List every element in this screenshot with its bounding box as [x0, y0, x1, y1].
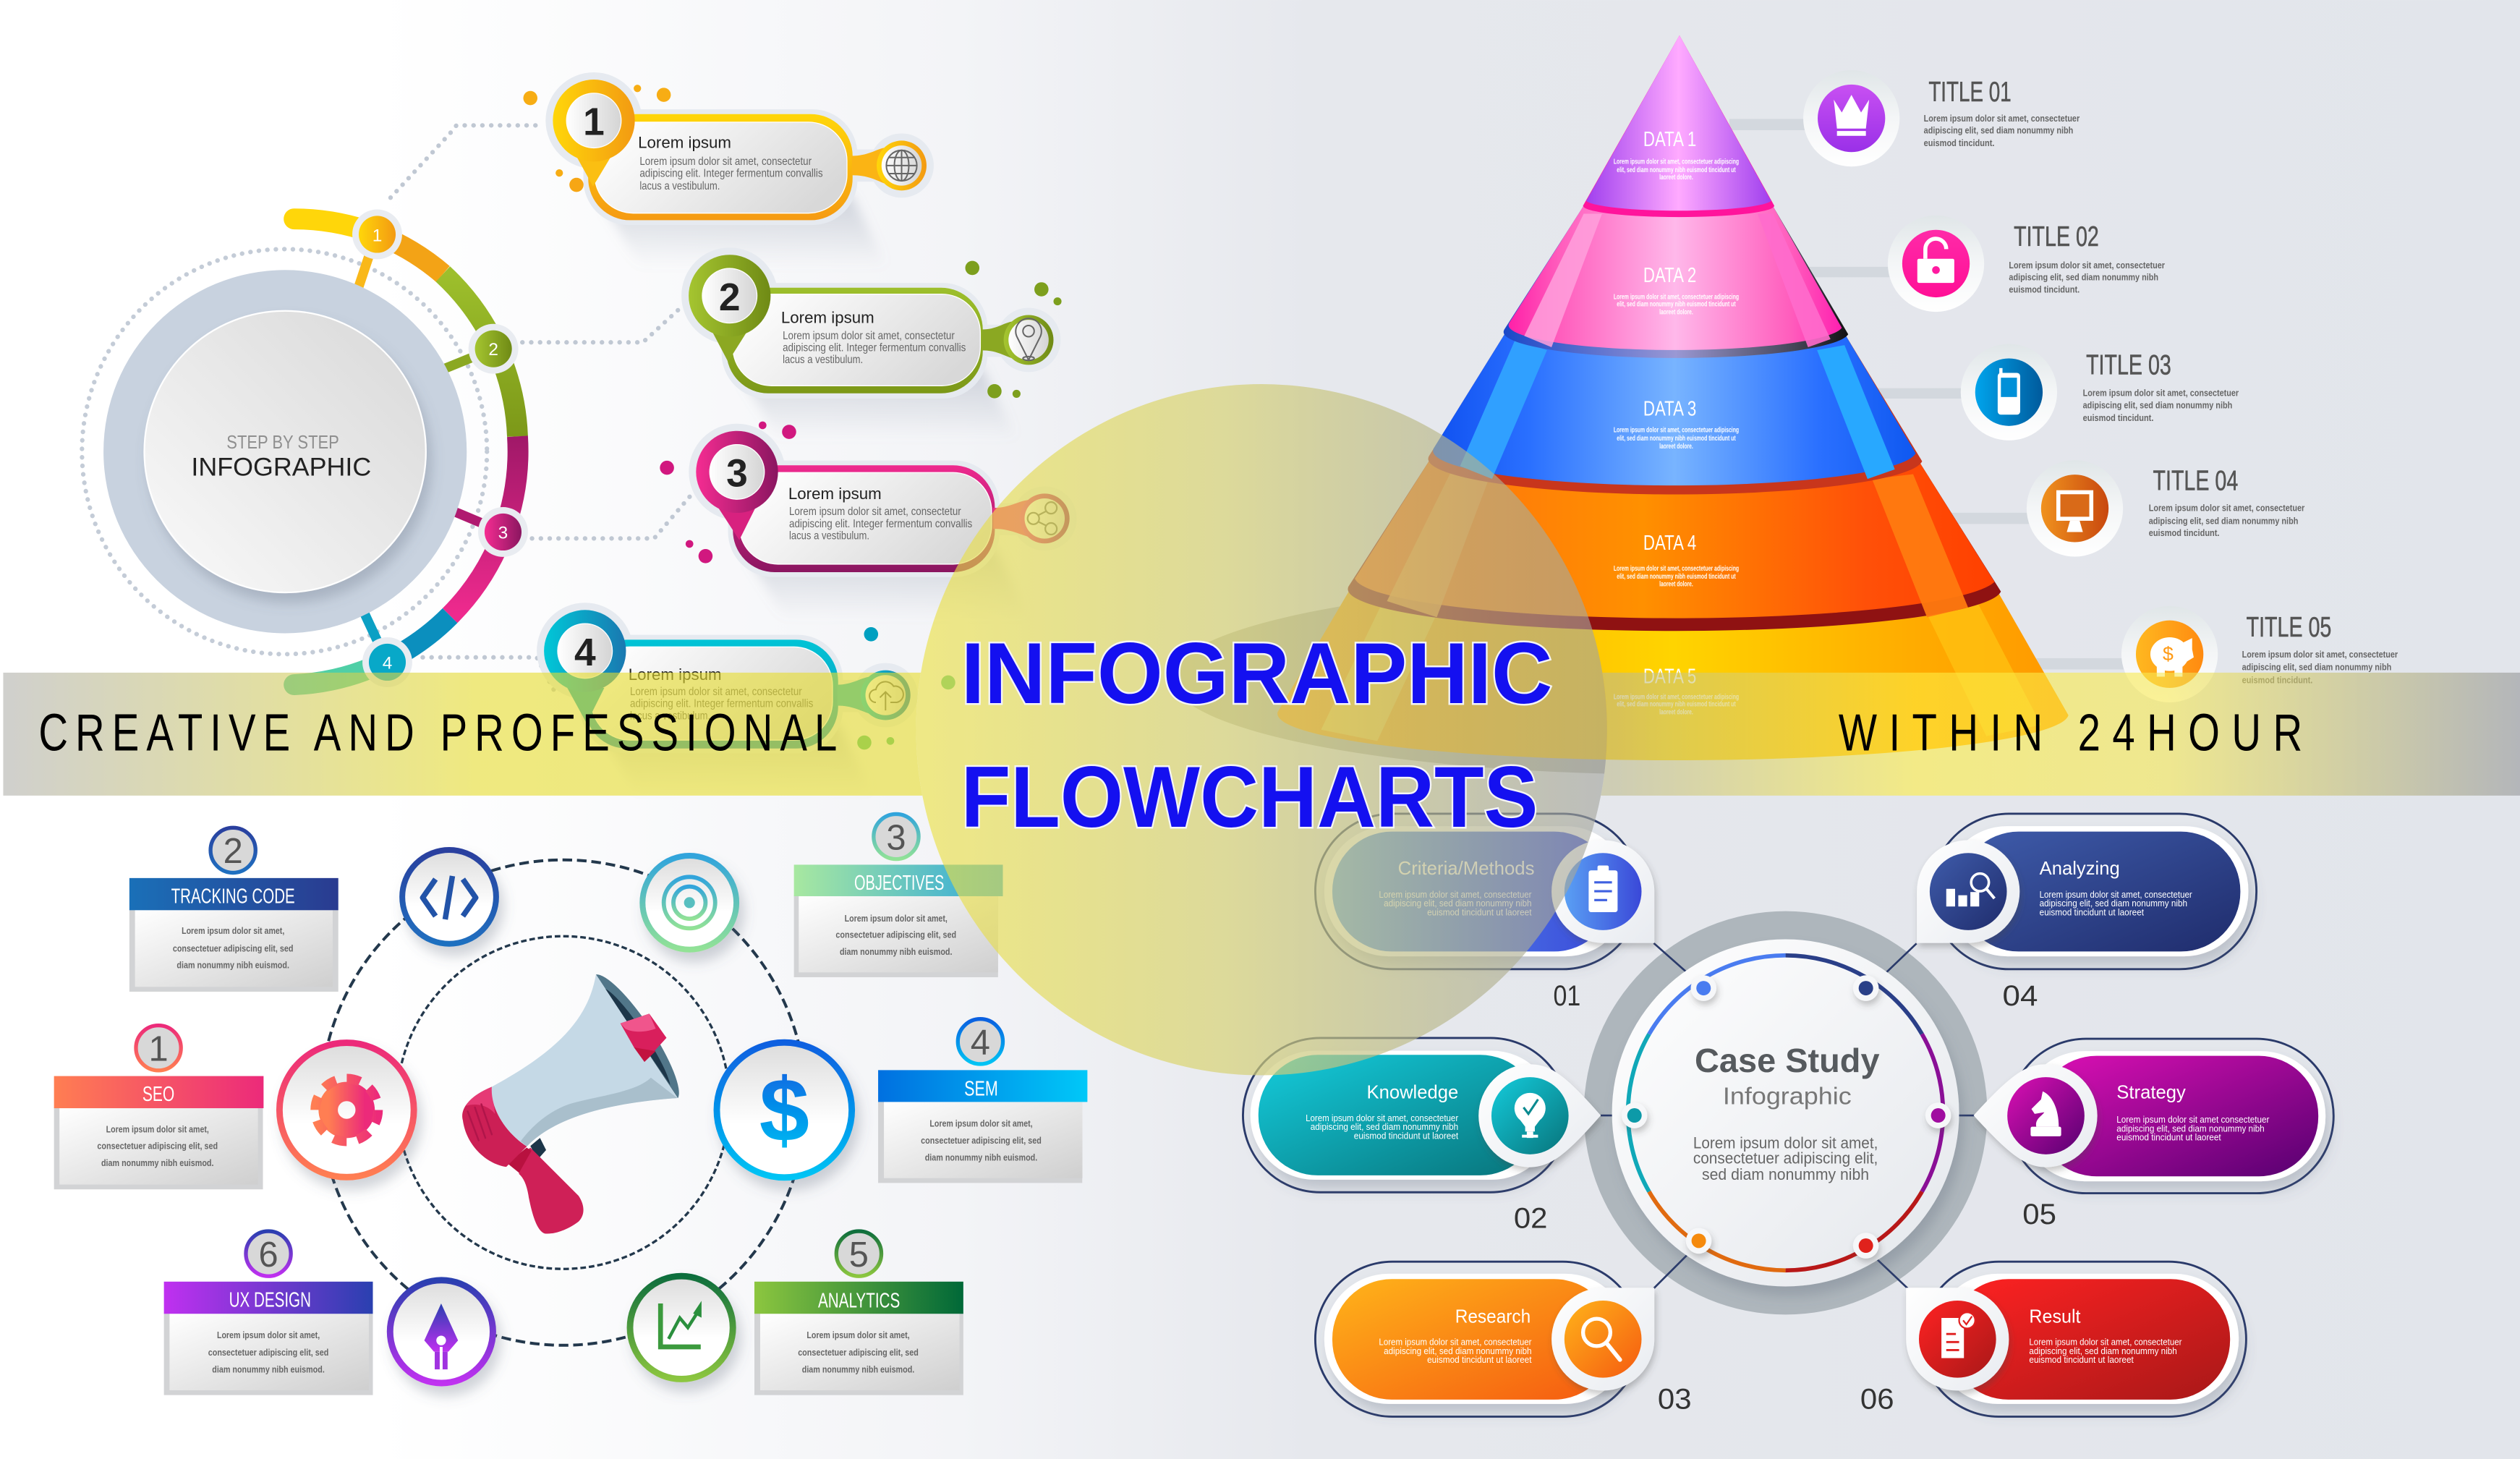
node: dollar: $	[759, 1060, 809, 1161]
capsule 05: adipiscing elit, sed diam nonummy nibh	[2116, 1123, 2265, 1133]
main title: FLOWCHARTS	[961, 749, 1538, 846]
icon: monitor	[2027, 460, 2123, 556]
box: analytics: consectetuer adipiscing elit, sed	[798, 1347, 919, 1358]
panel: step by step infographic	[82, 72, 1077, 794]
node: dollar	[717, 1042, 852, 1178]
banner text right: WITHIN 24HOUR	[1839, 703, 2302, 762]
hub coloured arcs	[1628, 956, 1943, 1270]
title 05: TITLE 05	[2247, 612, 2331, 643]
title 05: euismod tincidunt.	[2242, 674, 2312, 685]
card 2: Lorem ipsum dolor sit amet, consectetur	[783, 330, 955, 342]
capsule 02: 02	[1514, 1203, 1548, 1235]
dotted ring	[82, 249, 487, 654]
capsule 03	[1315, 1262, 1692, 1416]
pyramid layer 3: DATA 3	[1643, 397, 1696, 420]
pyramid layer 2: laoreet dolore.	[1659, 308, 1693, 316]
capsule 02: Knowledge	[1367, 1083, 1458, 1103]
box: SEM	[878, 1019, 1087, 1183]
pyramid layer 2: DATA 2	[1643, 264, 1696, 287]
card 1: 1	[583, 101, 605, 144]
box: analytics	[754, 1231, 963, 1395]
capsule 04: Analyzing	[2040, 859, 2120, 879]
pyramid layer 1	[1583, 35, 1774, 217]
pyramid layer 5	[1277, 587, 2069, 760]
icon: phone	[1961, 344, 2057, 441]
title 04: Lorem ipsum dolor sit amet, consectetuer	[2149, 503, 2304, 514]
box: UX design: 6	[258, 1235, 278, 1275]
shaded ellipse behind pyramid	[1180, 606, 1606, 774]
card 3: adipiscing elit. Integer fermentum convallis	[789, 518, 972, 530]
capsule 03: adipiscing elit, sed diam nonummy nibh	[1384, 1345, 1532, 1356]
box: SEO: Lorem ipsum dolor sit amet,	[106, 1123, 209, 1134]
title 04: adipiscing elit, sed diam nonummy nibh	[2149, 515, 2298, 526]
card 4: Lorem ipsum dolor sit amet, consectetur	[630, 686, 802, 698]
icon: piggy bank: $	[2163, 643, 2174, 665]
pyramid layer 3	[1429, 330, 1922, 495]
step nodes: 2	[488, 340, 498, 360]
node: gear	[279, 1043, 414, 1177]
box: objectives: consectetuer adipiscing elit, sed	[835, 930, 956, 940]
banner text left: CREATIVE AND PROFESSIONAL	[38, 703, 837, 762]
capsule 01: Lorem ipsum dolor sit amet, consectetuer	[1379, 889, 1532, 900]
main title	[961, 625, 1552, 846]
card 2: lacus a vestibulum.	[783, 354, 863, 366]
capsule 02: euismod tincidunt ut laoreet	[1354, 1130, 1458, 1141]
capsule 02: Lorem ipsum dolor sit amet, consectetuer	[1306, 1113, 1459, 1123]
title 01: adipiscing elit, sed diam nonummy nibh	[1924, 124, 2073, 135]
card 4: lacus a vestibulum.	[630, 710, 710, 723]
box: tracking code: TRACKING CODE	[171, 885, 295, 909]
title 02: Lorem ipsum dolor sit amet, consectetuer	[2009, 260, 2165, 271]
capsule 05: Lorem ipsum dolor sit amet consectetuer	[2116, 1114, 2270, 1125]
translucent centre circle	[916, 384, 1607, 1075]
connector bars	[1729, 119, 2129, 669]
megaphone	[462, 974, 679, 1234]
pyramid layer 2: elit, sed diam nonummy nibh euismod tincidunt ut	[1617, 300, 1736, 308]
title 02: euismod tincidunt.	[2009, 284, 2080, 294]
capsule 04: adipiscing elit, sed diam nonummy nibh	[2040, 898, 2187, 909]
card 4	[537, 603, 955, 794]
card 1: Lorem ipsum	[638, 133, 731, 151]
title 04: euismod tincidunt.	[2149, 527, 2219, 538]
hub disc	[145, 311, 426, 592]
title 01	[1924, 77, 2080, 148]
panel: case study	[1243, 814, 2333, 1416]
hub text: sed diam nonummy nibh	[1702, 1165, 1869, 1183]
box: SEM: diam nonummy nibh euismod.	[925, 1152, 1037, 1162]
card 1: adipiscing elit. Integer fermentum convallis	[639, 167, 823, 179]
hub ring	[103, 270, 467, 633]
pyramid layer 4: elit, sed diam nonummy nibh euismod tincidunt ut	[1617, 573, 1736, 581]
pyramid layer 3: laoreet dolore.	[1659, 443, 1693, 451]
card 4: Lorem ipsum	[629, 665, 722, 684]
pyramid layer 1: laoreet dolore.	[1659, 174, 1693, 182]
card 2: adipiscing elit. Integer fermentum convallis	[783, 342, 966, 354]
hub text	[1693, 1042, 1880, 1183]
connector lines	[1601, 943, 1977, 1288]
pyramid layer 1: Lorem ipsum dolor sit amet, consectetuer adipiscing	[1614, 158, 1739, 166]
box: objectives	[794, 814, 1003, 977]
capsule 05: euismod tincidunt ut laoreet	[2116, 1131, 2221, 1142]
capsule 04	[1917, 814, 2257, 1012]
card 3: Lorem ipsum dolor sit amet, consectetur	[789, 506, 961, 518]
translucent banner	[3, 673, 2520, 796]
title 04: TITLE 04	[2153, 466, 2238, 497]
box: UX design	[164, 1231, 373, 1395]
capsule 05	[1974, 1039, 2333, 1230]
box: analytics: 5	[849, 1235, 869, 1275]
card 3: lacus a vestibulum.	[789, 529, 869, 542]
capsule 03: Lorem ipsum dolor sit amet, consectetuer	[1379, 1336, 1532, 1347]
title 01: Lorem ipsum dolor sit amet, consectetuer	[1924, 113, 2080, 124]
pyramid layer 4: Lorem ipsum dolor sit amet, consectetuer adipiscing	[1614, 565, 1739, 573]
title 05: adipiscing elit, sed diam nonummy nibh	[2242, 662, 2391, 673]
spoke bars	[357, 234, 503, 662]
box: UX design: Lorem ipsum dolor sit amet,	[217, 1330, 320, 1340]
capsule 06: Lorem ipsum dolor sit amet, consectetuer	[2029, 1336, 2182, 1347]
box: SEO: SEO	[142, 1083, 174, 1106]
box: UX design: consectetuer adipiscing elit, sed	[208, 1347, 328, 1358]
hub heading	[191, 433, 371, 482]
capsule 02: adipiscing elit, sed diam nonummy nibh	[1311, 1121, 1458, 1132]
box: SEO: 1	[148, 1029, 169, 1068]
title 02: TITLE 02	[2014, 221, 2099, 252]
pyramid layer 2: Lorem ipsum dolor sit amet, consectetuer adipiscing	[1614, 293, 1739, 301]
icon: padlock	[1888, 216, 1984, 312]
title 05	[2242, 612, 2398, 685]
panel: marketing wheel	[54, 814, 1087, 1395]
node: pen tool	[390, 1280, 493, 1383]
hub text: consectetuer adipiscing elit,	[1693, 1149, 1878, 1167]
dashed rings	[320, 860, 806, 1345]
hub text: Case Study	[1695, 1042, 1880, 1079]
step nodes: 4	[383, 653, 392, 673]
card 2: Lorem ipsum	[781, 309, 874, 327]
box: analytics: diam nonummy nibh euismod.	[802, 1364, 914, 1375]
title 03: TITLE 03	[2086, 350, 2171, 381]
box: SEO	[54, 1026, 263, 1189]
title 02	[2009, 221, 2165, 294]
title 01: TITLE 01	[1928, 77, 2012, 108]
pyramid layer 5: elit, sed diam nonummy nibh euismod tincidunt ut	[1617, 701, 1736, 709]
box: analytics: Lorem ipsum dolor sit amet,	[806, 1330, 910, 1340]
box: SEO: diam nonummy nibh euismod.	[101, 1157, 214, 1168]
box: analytics: ANALYTICS	[818, 1290, 900, 1313]
icon: piggy bank	[2121, 606, 2218, 702]
box: objectives: OBJECTIVES	[854, 872, 944, 895]
capsule 01: 01	[1554, 980, 1580, 1012]
step nodes: 1	[373, 226, 382, 245]
box: UX design: UX DESIGN	[229, 1288, 311, 1311]
box: SEM: SEM	[964, 1077, 998, 1100]
capsule 04: euismod tincidunt ut laoreet	[2040, 906, 2144, 917]
pyramid layer 5: Lorem ipsum dolor sit amet, consectetuer adipiscing	[1614, 694, 1739, 702]
node: target	[642, 856, 736, 950]
card 4: 4	[574, 631, 596, 674]
pyramid layer 3: Lorem ipsum dolor sit amet, consectetuer adipiscing	[1614, 427, 1739, 435]
capsule 01: Criteria/Methods	[1398, 859, 1535, 879]
icon: crown	[1803, 70, 1899, 166]
card 1	[523, 72, 934, 267]
capsule 04: 04	[2003, 980, 2038, 1012]
segmented arc	[294, 219, 518, 685]
title 03: adipiscing elit, sed diam nonummy nibh	[2083, 399, 2232, 410]
capsule 06	[1860, 1262, 2246, 1416]
pyramid layer 3: elit, sed diam nonummy nibh euismod tincidunt ut	[1617, 435, 1736, 443]
capsule 06: 06	[1860, 1384, 1894, 1416]
capsule 01: adipiscing elit, sed diam nonummy nibh	[1384, 898, 1532, 909]
pyramid layer 2	[1504, 205, 1848, 358]
card 3	[660, 422, 1077, 618]
pyramid layer 1: elit, sed diam nonummy nibh euismod tincidunt ut	[1617, 166, 1736, 174]
box: objectives: Lorem ipsum dolor sit amet,	[845, 913, 948, 924]
pyramid layer 4: DATA 4	[1643, 532, 1696, 555]
box: UX design: diam nonummy nibh euismod.	[212, 1364, 325, 1375]
dotted leader lines	[391, 125, 691, 691]
box: SEO: consectetuer adipiscing elit, sed	[97, 1141, 218, 1152]
card 4: adipiscing elit. Integer fermentum convallis	[630, 698, 813, 710]
hub text: Infographic	[1723, 1083, 1852, 1110]
box: SEM: Lorem ipsum dolor sit amet,	[929, 1118, 1033, 1129]
box: SEM: consectetuer adipiscing elit, sed	[921, 1135, 1042, 1146]
hub text: Lorem ipsum dolor sit amet,	[1693, 1134, 1878, 1152]
pyramid layer 4	[1348, 456, 2001, 631]
capsule 03: euismod tincidunt ut laoreet	[1427, 1354, 1532, 1365]
title 02: adipiscing elit, sed diam nonummy nibh	[2009, 272, 2158, 283]
node: code	[402, 850, 496, 944]
capsule 01	[1315, 814, 1654, 1012]
capsule 05: Strategy	[2116, 1083, 2186, 1103]
card 1: lacus a vestibulum.	[639, 180, 720, 192]
step nodes	[352, 210, 528, 687]
capsule 01: euismod tincidunt ut laoreet	[1427, 906, 1532, 917]
capsule 04: Lorem ipsum dolor sit amet, consectetuer	[2040, 889, 2192, 900]
box: SEM: 4	[971, 1024, 990, 1063]
title 03: Lorem ipsum dolor sit amet, consectetuer	[2083, 388, 2239, 399]
box: objectives: diam nonummy nibh euismod.	[840, 946, 952, 957]
title 04	[2149, 466, 2304, 538]
capsule 02	[1243, 1038, 1601, 1235]
box: tracking code	[129, 828, 339, 992]
card 2: 2	[719, 276, 741, 319]
capsule 06: Result	[2029, 1307, 2081, 1327]
hub heading: INFOGRAPHIC	[191, 453, 371, 482]
box: tracking code: diam nonummy nibh euismod.	[176, 960, 289, 971]
hub heading: STEP BY STEP	[226, 433, 339, 453]
pyramid layer 4: laoreet dolore.	[1659, 580, 1693, 588]
hub disc	[1612, 940, 1959, 1286]
capsule 03: 03	[1658, 1384, 1692, 1416]
panel: pyramid	[1172, 35, 2398, 775]
pyramid layer 5: DATA 5	[1643, 665, 1696, 688]
title 03: euismod tincidunt.	[2083, 412, 2153, 423]
node: chart	[630, 1276, 733, 1379]
card 3: 3	[726, 452, 748, 495]
capsule 03: Research	[1455, 1307, 1531, 1327]
box: tracking code: consectetuer adipiscing elit, sed	[173, 943, 294, 953]
title 01: euismod tincidunt.	[1924, 137, 1994, 148]
card 2	[681, 247, 1062, 439]
hub nodes	[1622, 975, 1951, 1259]
card 1: Lorem ipsum dolor sit amet, consectetur	[639, 156, 812, 168]
box: tracking code: 2	[224, 832, 243, 871]
step nodes: 3	[498, 523, 508, 543]
pyramid layer 5: laoreet dolore.	[1659, 709, 1693, 717]
title 03	[2083, 350, 2239, 423]
title 05: Lorem ipsum dolor sit amet, consectetuer	[2242, 649, 2398, 660]
capsule 06: adipiscing elit, sed diam nonummy nibh	[2029, 1345, 2177, 1356]
hub outer ring	[1584, 911, 1987, 1314]
pyramid layer 1: DATA 1	[1643, 128, 1696, 151]
card 3: Lorem ipsum	[788, 485, 882, 503]
main title: INFOGRAPHIC	[961, 625, 1552, 722]
capsule 06: euismod tincidunt ut laoreet	[2029, 1354, 2134, 1365]
capsule 05: 05	[2022, 1199, 2056, 1230]
box: objectives: 3	[886, 818, 906, 857]
box: tracking code: Lorem ipsum dolor sit amet,	[182, 925, 284, 936]
